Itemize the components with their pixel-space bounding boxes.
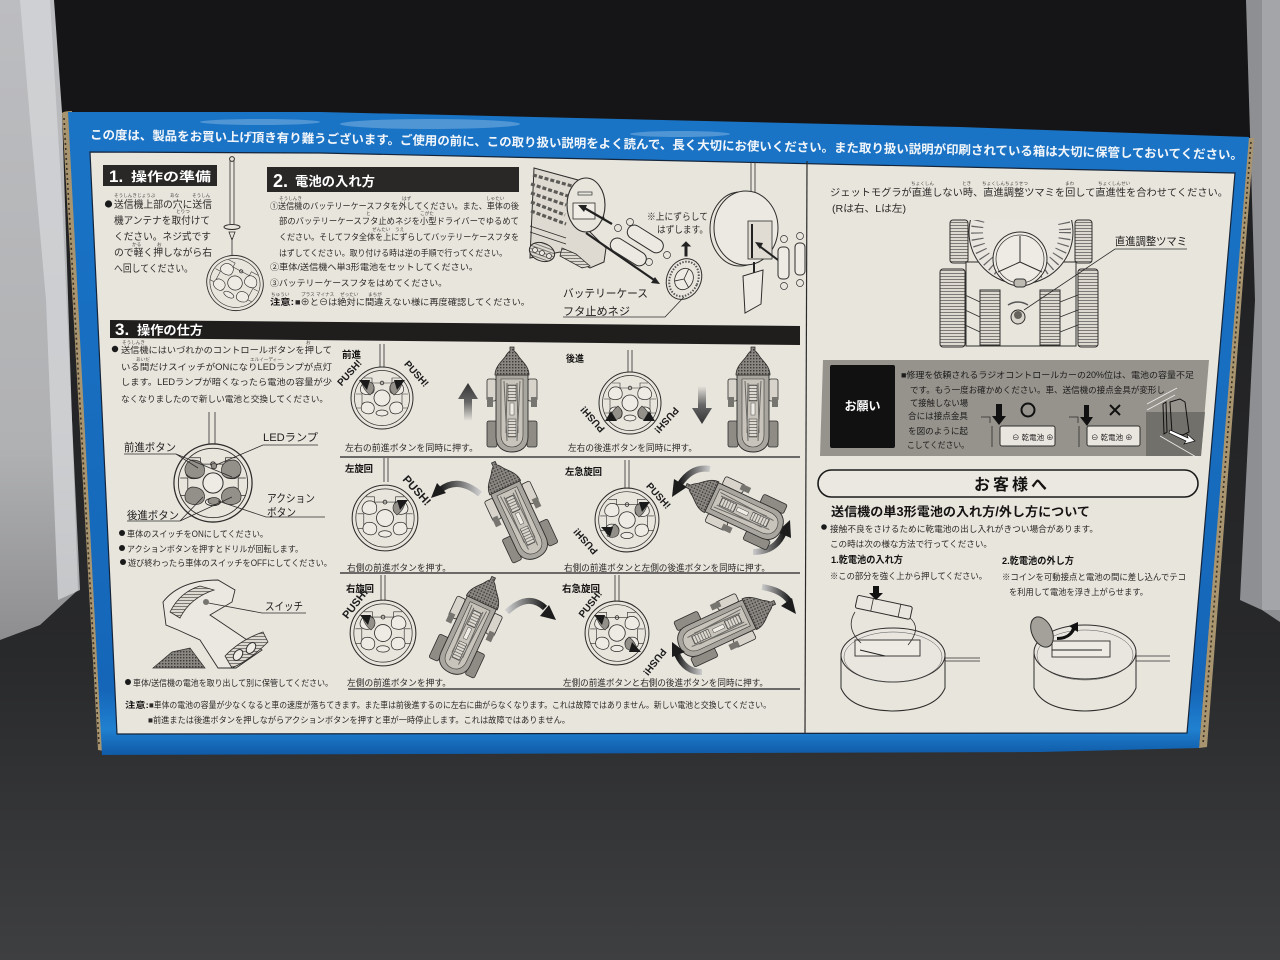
diagram: transmitter button layout <box>124 412 325 522</box>
cell: reverse: 後進 <box>566 353 584 365</box>
text: adjust instruction: (Rは右、Lは左) <box>832 202 906 215</box>
cell: quick right turn: 左側の前進ボタンと右側の後進ボタンを同時に押す。 <box>563 677 768 688</box>
cell: left turn: 右側の前進ボタンを押す。 <box>347 562 451 573</box>
label: reverse button: 後進ボタン <box>127 508 179 522</box>
text: switch and action notes <box>119 528 332 568</box>
text: switch and action notes: 遊び終わったら車体のスイッチをOFFにしてください。 <box>128 557 332 568</box>
label: LED lamp: LEDランプ <box>263 431 318 444</box>
text: antenna instructions: かる <box>132 241 141 248</box>
panel: white instruction sheet <box>90 152 1235 734</box>
text: adjust instruction: まわ <box>1065 180 1075 186</box>
column: how to insert: 1.乾電池の入れ方 <box>831 554 903 566</box>
cell: reverse <box>566 347 778 453</box>
diagram: correct contact: ⊖ 乾電池 ⊕ <box>1012 432 1054 442</box>
label: forward button <box>124 440 232 477</box>
text: battery steps: ②車体/送信機へ単3形電池をセットしてください。 <box>270 261 478 272</box>
text: battery steps: ③バッテリーケースフタをはめてください。 <box>270 278 447 288</box>
text: control buttons intro: いる間だけスイッチがONになりLEDランプが点灯 <box>121 361 332 372</box>
section 2: inserting batteries <box>267 162 805 318</box>
label: action button <box>218 492 325 519</box>
cell: right turn: PUSH! <box>340 587 371 621</box>
cell: forward: PUSH! <box>336 358 365 389</box>
text: battery steps: ください。そしてフタ全体を上にずらしてバッテリーケースフタを <box>279 231 519 242</box>
label: adjust knob: 直進調整ツマミ <box>1115 234 1187 248</box>
text: control buttons intro: 送信機にはいづれかのコントロールボタンを押して <box>121 344 332 355</box>
text: antenna instructions: お <box>157 241 162 247</box>
text: battery steps: と <box>366 211 371 216</box>
heading 3: 操作の仕方 <box>137 322 203 338</box>
section: battery insert and remove <box>821 504 1186 711</box>
arrow: reverse <box>692 386 712 424</box>
column: how to remove: 2.乾電池の外し方 <box>1002 555 1074 567</box>
text: adjust instruction: ちょくしんせい <box>1098 181 1131 187</box>
text: antenna instructions: 機アンテナを取付けて <box>114 214 210 227</box>
cell: right turn: 右旋回 <box>346 583 374 595</box>
text: antenna instructions: そうしん <box>192 192 211 199</box>
caution line: ぜったい <box>340 292 359 298</box>
cell: quick right turn: 右急旋回 <box>562 583 600 595</box>
text: battery steps: ①送信機のバッテリーケースフタを外してください。また、車体の後 <box>270 200 519 211</box>
vehicle: forward <box>487 347 537 452</box>
text: repair notice <box>901 369 1194 450</box>
vehicle: right turn <box>427 567 516 683</box>
column: how to insert <box>830 554 987 711</box>
text: repair notice: て接触しない場 <box>910 397 968 408</box>
text: adjust instruction: ちょくしん <box>911 181 934 187</box>
badge: request: お願い <box>844 399 881 413</box>
heading 1 <box>103 165 217 186</box>
cell: quick left turn: 右側の前進ボタンと左側の後進ボタンを同時に押す。 <box>564 562 770 573</box>
label: action button: アクション <box>267 492 315 505</box>
illustration: vehicle switch <box>153 580 306 668</box>
icon: antenna and transmitter <box>197 157 273 320</box>
label: battery case lid screw: フタ止めネジ <box>563 305 630 318</box>
notes: caution footer: ■前進または後進ボタンを押しながらアクションボタンを押すと車が一時停止します。これは故障ではありません。 <box>148 714 570 725</box>
column: how to remove <box>1002 555 1186 711</box>
text: battery steps: しゃたい <box>486 196 505 202</box>
text: antenna instructions: ください。ネジ式です <box>114 230 211 243</box>
text: battery steps: 部のバッテリーケースフタ止めネジを小型ドライバーでゆるめて <box>279 215 519 226</box>
cell: forward <box>336 344 537 453</box>
text: control buttons intro: お <box>306 339 311 345</box>
operation row separators <box>340 457 800 689</box>
text: adjust instruction: ちょくしんちょうせつ <box>982 181 1028 187</box>
vehicle: quick left turn <box>676 463 792 552</box>
diagram: incorrect contact: ⊖ 乾電池 ⊕ <box>1091 432 1133 442</box>
section: battery insert and remove: 送信機の単3形電池の入れ方/外し方について <box>831 504 1090 519</box>
heading 3 <box>110 320 800 345</box>
text: control buttons intro: エルイーディー <box>250 356 282 363</box>
cell: forward: PUSH! <box>401 359 430 390</box>
text: antenna instructions <box>105 192 212 275</box>
cell: quick right turn: PUSH! <box>577 589 605 620</box>
text: adjust instruction <box>830 180 1228 215</box>
text: battery steps: こがた <box>420 210 434 217</box>
panel: request notice <box>820 360 1209 458</box>
section 3: how to operate <box>110 320 800 725</box>
heading 2: 電池の入れ方 <box>295 174 375 189</box>
label: forward button: 前進ボタン <box>124 440 176 454</box>
cell: quick right turn: PUSH! <box>640 646 668 677</box>
illustration: AA batteries <box>608 218 670 268</box>
caution line <box>270 291 530 307</box>
cell: left turn <box>345 452 560 573</box>
text: repair notice: 合には接点金具 <box>908 410 968 421</box>
caution line: ■⊕と⊖は絶対に間違えない様に再度確認してください。 <box>295 296 530 307</box>
vehicle: reverse <box>728 347 778 452</box>
heading 2: 2. <box>273 171 288 191</box>
column: how to remove: を利用して電池を浮き上がらせます。 <box>1009 586 1148 597</box>
heading 1: 1. <box>109 167 123 186</box>
label: action button: ボタン <box>267 506 296 519</box>
cell: quick left turn <box>564 460 792 573</box>
arrow: right turn <box>507 601 556 620</box>
cell: forward: 左右の前進ボタンを同時に押す。 <box>345 442 478 453</box>
text: battery steps: はずしてください。取り付ける時は逆の手順で行ってください。 <box>279 247 507 258</box>
text: repair notice: です。もう一度お確かめください。車、送信機の接点金具が変形し <box>910 384 1165 395</box>
column: how to remove: ※コインを可動接点と電池の間に差し込んでテコ <box>1002 571 1186 582</box>
diagram: correct contact <box>981 404 1055 447</box>
text: control buttons intro: します。LEDランプが暗くなったら電池の容量が少 <box>121 376 332 387</box>
illustration: transmitter battery slot <box>710 162 805 313</box>
cell: left turn: 左旋回 <box>345 463 373 475</box>
text: storage note: 車体/送信機の電池を取り出して別に保管してください。 <box>133 677 333 688</box>
heading 2 <box>267 167 519 192</box>
cell: left turn: PUSH! <box>400 474 433 508</box>
label: adjust knob <box>1024 234 1187 310</box>
text: battery steps: はず <box>402 195 412 202</box>
text: antenna instructions: とりつ <box>176 209 190 215</box>
text: antenna instructions: あな <box>170 192 180 199</box>
notes: caution footer <box>125 699 771 725</box>
heading: to customers: お客様へ <box>974 475 1050 494</box>
note: slide upward <box>647 212 708 256</box>
text: antenna instructions: 送信機上部の穴に送信 <box>114 198 212 211</box>
cell: reverse: 左右の後進ボタンを同時に押す。 <box>568 442 697 453</box>
text: repair notice: を図のように起 <box>908 426 968 436</box>
text: switch and action notes: 車体のスイッチをONにしてください。 <box>127 528 268 539</box>
text: control buttons intro: そうしんき <box>122 339 145 346</box>
text: control buttons intro <box>112 339 332 404</box>
diagram: vehicle top with adjust knob <box>940 220 1187 348</box>
text: battery steps: ぜんたい <box>372 227 391 233</box>
text: antenna instructions: ので軽く押しながら右 <box>114 246 212 259</box>
column: how to insert: ※この部分を強く上から押してください。 <box>830 570 987 581</box>
vehicle: left turn <box>471 452 560 568</box>
cell: quick right turn <box>562 575 796 688</box>
text: battery steps <box>270 195 519 288</box>
note: slide upward: ※上にずらして <box>647 212 708 223</box>
icon: battery cover screw <box>660 253 708 305</box>
vehicle: quick right turn <box>669 580 785 669</box>
box: cardboard edges <box>62 111 1254 752</box>
text: control buttons intro: あいだ <box>136 357 150 363</box>
caution line: ちゅうい <box>271 292 290 298</box>
text: repair notice: ■修理を依頼されるラジオコントロールカーの20%位は、電池の容量不足 <box>901 369 1194 380</box>
cell: reverse: PUSH! <box>579 403 608 434</box>
text: antenna instructions: そうしんきじょうぶ <box>114 192 156 199</box>
label: LED lamp <box>216 431 318 465</box>
cell: right turn <box>340 567 556 688</box>
text: battery steps: そうしんき <box>279 195 302 202</box>
label: reverse button <box>127 497 232 522</box>
header sentence: この度は、製品をお買い上げ頂き有り難うございます。ご使用の前に、この取り扱い説明をよく読んで、長く大切にお使いください。また取り扱い説明が印刷されている箱は大切に保管しておいてください。 <box>90 127 1243 162</box>
worn print streaks <box>200 119 730 137</box>
section: battery insert and remove: 接触不良をさけるために乾電池の出し入れがきつい場合があります。 <box>830 523 1098 534</box>
cell: forward: 前進 <box>342 349 361 361</box>
label: battery case lid screw: バッテリーケース <box>563 287 648 300</box>
cell: right turn: 左側の前進ボタンを押す。 <box>347 677 451 688</box>
cell: quick left turn: PUSH! <box>572 525 601 556</box>
diagram: bend contact <box>1147 388 1198 458</box>
arrows: quick left turn <box>672 469 791 552</box>
text: adjust instruction: ジェットモグラが直進しない時、直進調整ツマミを回して直進性を合わせてください。 <box>830 186 1228 199</box>
text: antenna instructions: へ回してください。 <box>114 263 193 275</box>
cell: quick left turn: 左急旋回 <box>565 466 602 478</box>
cell: quick left turn: PUSH! <box>643 481 672 512</box>
notes: caution footer: 注意: <box>125 699 149 710</box>
heading 1: 操作の準備 <box>131 169 212 184</box>
box: blue printed face <box>68 112 1249 755</box>
note: slide upward: はずします。 <box>657 225 708 236</box>
arrow: forward <box>458 383 478 421</box>
arrows: quick right turn <box>672 587 796 672</box>
label: switch: スイッチ <box>265 600 303 613</box>
label: battery case lid screw <box>563 287 684 318</box>
right column: steering adjust <box>830 180 1228 347</box>
heading 3: 3. <box>115 320 129 339</box>
heading: to customers <box>818 470 1198 497</box>
column divider <box>805 161 807 733</box>
section: battery insert and remove: この時は次の様な方法で行ってください。 <box>830 538 992 549</box>
text: control buttons intro: なくなりましたので新しい電池と交換してください。 <box>121 393 328 404</box>
section 1: preparation <box>103 157 273 320</box>
text: battery steps: うえ <box>395 227 405 233</box>
text: repair notice: こしてください。 <box>907 440 969 450</box>
caution line: プラス マイナス <box>301 292 335 298</box>
illustration: vehicle rear with batteries <box>527 168 660 284</box>
diagram: incorrect contact <box>1069 405 1140 447</box>
arrow: left turn <box>431 483 480 498</box>
illustration: transmitter with coin <box>1026 613 1170 711</box>
notes: caution footer: ■車体の電池の容量が少なくなると車の速度が落ちてきます。また車は前後進するのに左右に曲がらなくなります。これは故障ではありません。新しい電池と交換してください。 <box>149 699 771 710</box>
text: switch and action notes: アクションボタンを押すとドリルが回転します。 <box>127 543 303 554</box>
cell: reverse: PUSH! <box>651 404 680 435</box>
text: adjust instruction: とき <box>962 180 971 186</box>
caution line: まちが <box>368 291 382 298</box>
badge: request <box>830 365 895 448</box>
illustration: transmitter with battery <box>841 586 980 711</box>
caution line: 注意: <box>270 296 294 307</box>
